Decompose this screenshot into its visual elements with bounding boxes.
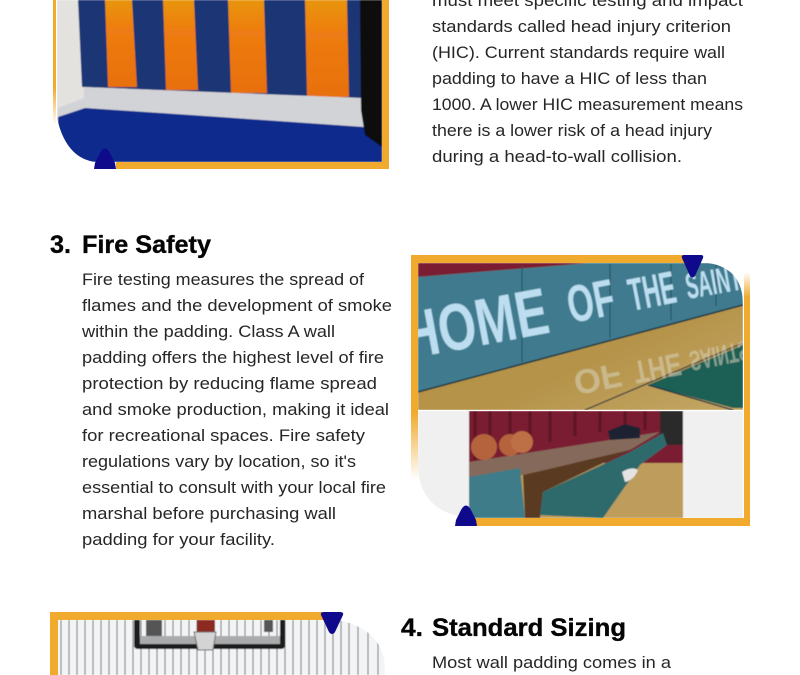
paragraph: impact standards bbox=[432, 0, 743, 166]
paragraph: impact standards: padding to have a HIC of less than bbox=[432, 69, 707, 88]
icon: triangle marker down bbox=[682, 255, 703, 278]
reflection of lettering on the floor: OF bbox=[570, 355, 625, 401]
paragraph: impact standards: (HIC). Current standards require wall bbox=[432, 43, 725, 62]
icon: triangle marker bbox=[94, 148, 116, 169]
reflection of lettering on the floor: SAINTS bbox=[687, 335, 752, 377]
paragraph: fire safety: within the padding. Class A wall bbox=[81, 322, 335, 341]
paragraph: fire safety: essential to consult with your local fire bbox=[82, 478, 386, 497]
photo: home of the saints padding bbox=[418, 263, 743, 410]
photo: home of the saints padding: HOME bbox=[397, 273, 554, 373]
reflection of lettering on the floor bbox=[574, 340, 743, 394]
heading: 3. Fire Safety: Fire Safety bbox=[82, 231, 211, 259]
image: gym wall padding photos bbox=[397, 255, 756, 526]
photo: home of the saints padding: THE bbox=[624, 261, 680, 321]
photo: stage edge padding with basketballs bbox=[418, 411, 743, 518]
paragraph: impact standards: 1000. A lower HIC measurement means bbox=[432, 95, 743, 114]
image: orange and navy padded wall bbox=[53, 0, 389, 169]
paragraph: fire safety: and smoke production, making it ideal bbox=[82, 400, 389, 419]
paragraph: impact standards: during a head-to-wall collision. bbox=[432, 147, 682, 166]
paragraph: impact standards: there is a lower risk of a head injury bbox=[432, 121, 713, 140]
paragraph: fire safety bbox=[81, 270, 392, 549]
paragraph: fire safety: padding for your facility. bbox=[82, 530, 275, 549]
paragraph: fire safety: Fire testing measures the spread of bbox=[82, 270, 364, 289]
paragraph: fire safety: regulations vary by location, so it's bbox=[82, 452, 356, 471]
paragraph: fire safety: flames and the development of smoke bbox=[82, 296, 392, 315]
image: striped wall with basketball hoop bbox=[50, 612, 385, 675]
heading: 4. Standard Sizing: Standard Sizing bbox=[432, 614, 626, 642]
paragraph: fire safety: protection by reducing flame spread bbox=[82, 374, 377, 393]
icon: triangle marker down bbox=[321, 612, 343, 634]
paragraph: fire safety: marshal before purchasing wall bbox=[82, 504, 336, 523]
paragraph: fire safety: padding offers the highest level of fire bbox=[82, 348, 384, 367]
heading: 3. Fire Safety: 3. bbox=[50, 231, 71, 259]
reflection of lettering on the floor: THE bbox=[631, 346, 685, 390]
paragraph: standard sizing: Most wall padding comes in a bbox=[432, 653, 672, 672]
photo: home of the saints padding: OF bbox=[562, 269, 619, 335]
paragraph: fire safety: for recreational spaces. Fire safety bbox=[82, 426, 366, 445]
paragraph: impact standards: standards called head injury criterion bbox=[432, 17, 731, 36]
icon: triangle marker up bbox=[455, 506, 477, 526]
heading: 4. Standard Sizing: 4. bbox=[401, 614, 423, 642]
